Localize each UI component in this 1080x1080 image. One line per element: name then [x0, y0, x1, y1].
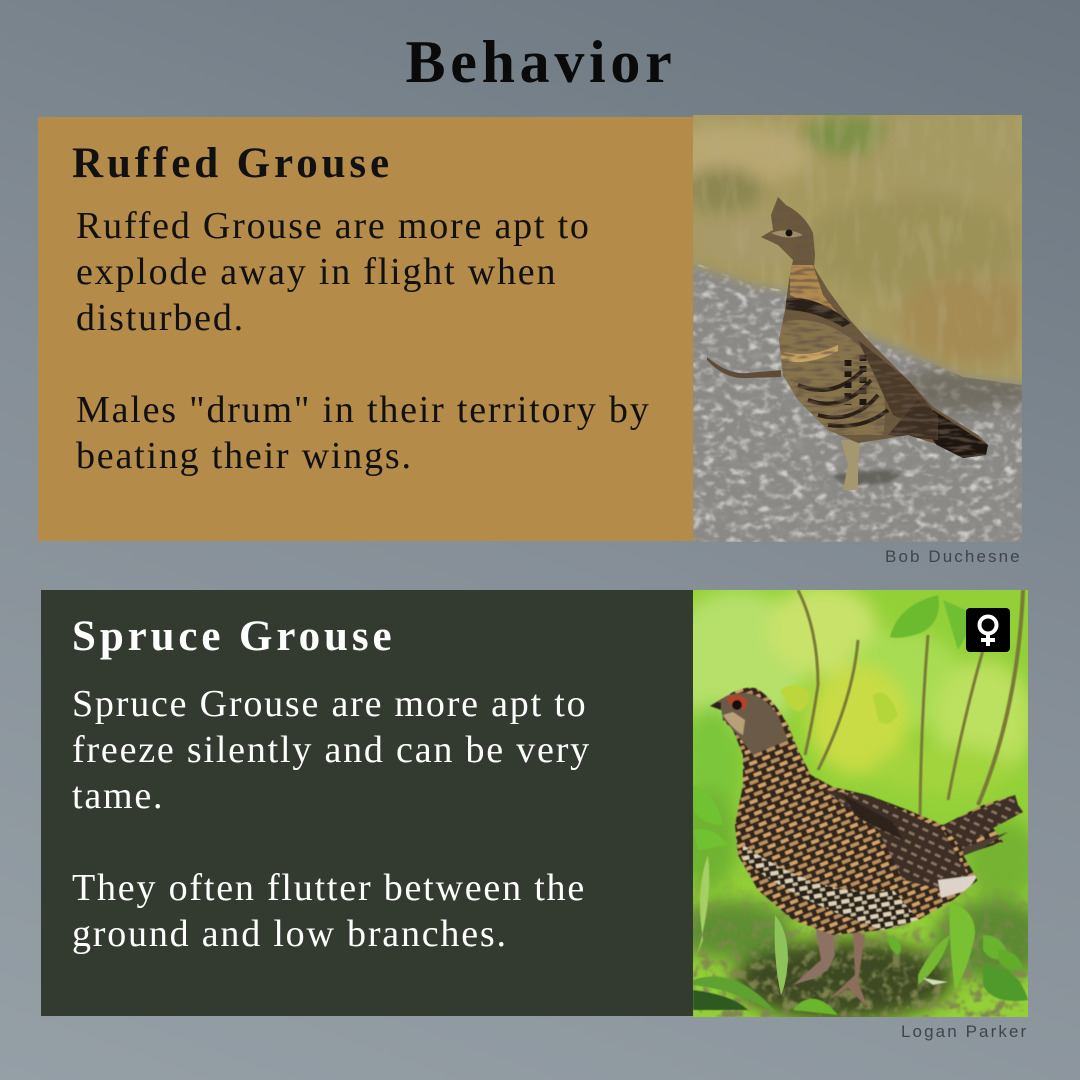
heading: ruffed grouse: Ruffed Grouse [72, 140, 393, 187]
text block: spruce grouse behavior: ground and low branches. [72, 913, 508, 955]
text block: ruffed grouse behavior: Ruffed Grouse are more apt to [76, 205, 591, 247]
gravel path [683, 262, 1033, 552]
text block: spruce grouse behavior [72, 683, 591, 955]
text block: spruce grouse behavior: tame. [72, 775, 164, 817]
photo: spruce grouse [693, 590, 1028, 1017]
text block: spruce grouse behavior: Spruce Grouse are more apt to [72, 683, 587, 725]
text block: ruffed grouse behavior: disturbed. [76, 297, 245, 339]
text block: ruffed grouse behavior [76, 205, 650, 477]
panel: spruce grouse [41, 590, 693, 1016]
title: Behavior [406, 29, 676, 95]
icon: female symbol [966, 608, 1010, 652]
text block: spruce grouse behavior: freeze silently and can be very [72, 729, 591, 771]
heading: spruce grouse: Spruce Grouse [72, 613, 395, 660]
photo: ruffed grouse [693, 115, 1022, 542]
panel: ruffed grouse [38, 117, 693, 541]
text block: ruffed grouse behavior: beating their wings. [76, 435, 413, 477]
caption: photo credit: Logan Parker [901, 1022, 1028, 1041]
text block: ruffed grouse behavior: Males "drum" in their territory by [76, 389, 650, 431]
caption: photo credit: Bob Duchesne [885, 547, 1022, 566]
leaves and stems [693, 590, 1028, 1015]
text block: spruce grouse behavior: They often flutter between the [72, 867, 586, 909]
bird: ruffed grouse [707, 195, 993, 490]
text block: ruffed grouse behavior: explode away in flight when [76, 251, 557, 293]
bird: spruce grouse [710, 688, 1028, 1008]
